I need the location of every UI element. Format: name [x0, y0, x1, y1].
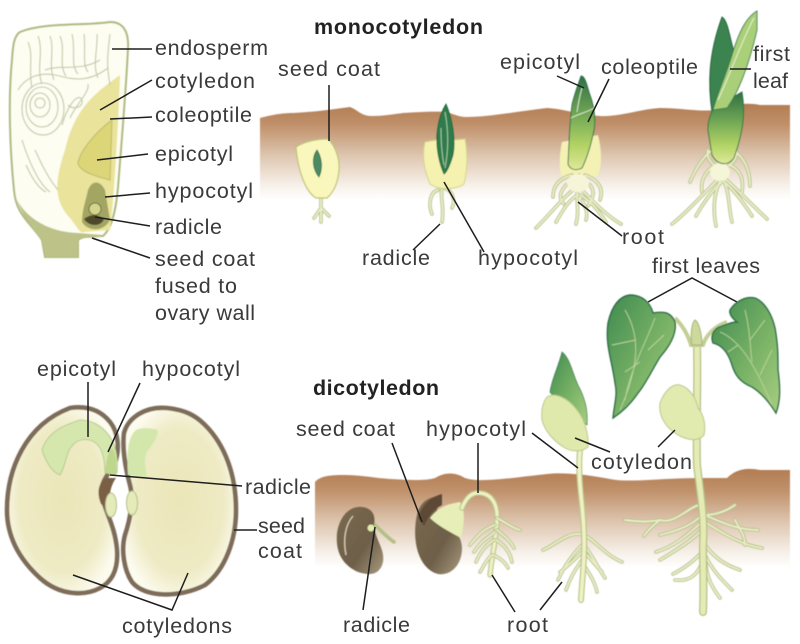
label: first leaf: leaf — [753, 69, 788, 93]
label: seed coat: coat — [258, 539, 302, 563]
kernel body — [10, 22, 128, 257]
plant: monocot stage 4 — [672, 11, 767, 226]
left leaf — [607, 295, 675, 418]
plant: dicot bean 2 — [415, 493, 520, 575]
label: cotyledons — [73, 573, 232, 638]
label: first leaf: first — [753, 42, 790, 66]
right leaf — [712, 298, 780, 413]
panel: corn kernel section — [10, 22, 128, 257]
left cotyledon — [7, 407, 118, 593]
label: hypocotyl — [426, 417, 526, 493]
plant: dicot stage 3 — [542, 352, 622, 600]
label: radicle: radicle — [245, 475, 311, 499]
right cotyledon — [123, 408, 236, 594]
label: epicotyl — [97, 142, 233, 166]
label: hypocotyl: hypocotyl — [142, 357, 240, 381]
label: radicle: radicle — [343, 613, 410, 637]
heading: monocotyledon: monocotyledon — [314, 15, 483, 39]
label: seed coat: seed coat — [296, 417, 395, 441]
plant: monocot stage 3 — [536, 76, 621, 228]
cotyledon — [660, 385, 705, 440]
label: coleoptile — [588, 55, 698, 122]
embryo — [82, 182, 110, 229]
plant: dicot stage 4 — [607, 295, 780, 612]
label: epicotyl — [500, 50, 584, 88]
label: epicotyl: epicotyl — [155, 142, 233, 166]
label: seed coat fused to ovary wall: ovary wall — [155, 301, 255, 325]
endosperm swirl lines — [18, 34, 110, 192]
coleoptile and epicotyl — [78, 120, 112, 180]
label: radicle — [362, 224, 440, 270]
label: cotyledons: cotyledons — [122, 614, 232, 638]
label: radicle — [343, 527, 410, 637]
base of kernel — [17, 200, 103, 257]
panel: monocot soil band — [260, 104, 790, 200]
label: cotyledon: cotyledon — [155, 69, 255, 93]
plant: monocot stage 2 — [424, 104, 467, 222]
label: coleoptile: coleoptile — [601, 55, 698, 79]
label: hypocotyl — [108, 357, 240, 452]
upper leaf — [550, 352, 587, 425]
label: first leaf — [730, 42, 790, 93]
plant: dicot bean 1 — [337, 507, 394, 574]
cotyledon — [542, 395, 588, 451]
hypocotyl — [105, 448, 116, 476]
label: epicotyl — [37, 357, 116, 437]
label: seed coat — [296, 417, 422, 522]
label: seed coat: seed — [258, 514, 305, 538]
label: root: root — [622, 225, 664, 249]
leader: hypocotyl to stem — [532, 433, 578, 468]
label: hypocotyl: hypocotyl — [478, 246, 578, 270]
label: first leaves — [648, 254, 760, 302]
stem tip and petioles — [675, 318, 727, 345]
label: coleoptile: coleoptile — [155, 103, 252, 127]
label: radicle: radicle — [155, 215, 222, 239]
label: first leaves: first leaves — [652, 254, 760, 278]
label: hypocotyl: hypocotyl — [426, 417, 526, 441]
label: root — [492, 575, 562, 637]
label: root: root — [507, 613, 548, 637]
embryo swellings — [106, 493, 116, 517]
label: radicle — [110, 475, 311, 499]
label: seed coat: seed coat — [278, 57, 380, 81]
label: epicotyl: epicotyl — [37, 357, 116, 381]
label: cotyledon: cotyledon — [591, 450, 692, 474]
label: cotyledon — [100, 69, 255, 110]
right plumule — [127, 428, 158, 477]
label: seed coat — [234, 514, 305, 563]
label: root — [578, 202, 664, 249]
label: hypocotyl — [105, 179, 253, 203]
panel: dicot soil band — [315, 469, 790, 568]
heading: dicotyledon: dicotyledon — [313, 376, 439, 400]
label: seed coat — [278, 57, 380, 141]
label: epicotyl: epicotyl — [500, 50, 580, 74]
panel: dicot seed section — [7, 407, 236, 594]
label: radicle — [95, 215, 222, 239]
label: endosperm: endosperm — [155, 36, 268, 60]
stem — [697, 345, 703, 612]
label: radicle: radicle — [362, 246, 430, 270]
radicle tip — [99, 478, 116, 512]
label: seed coat fused to ovary wall — [92, 238, 255, 325]
plant: monocot stage 1 — [296, 139, 339, 222]
label: seed coat fused to ovary wall: seed coat — [155, 247, 255, 271]
cotyledon — [57, 75, 120, 232]
label: hypocotyl — [444, 182, 578, 270]
label: cotyledon — [575, 430, 692, 474]
label: seed coat fused to ovary wall: fused to — [155, 274, 237, 298]
epicotyl — [42, 420, 117, 475]
label: hypocotyl: hypocotyl — [155, 179, 253, 203]
